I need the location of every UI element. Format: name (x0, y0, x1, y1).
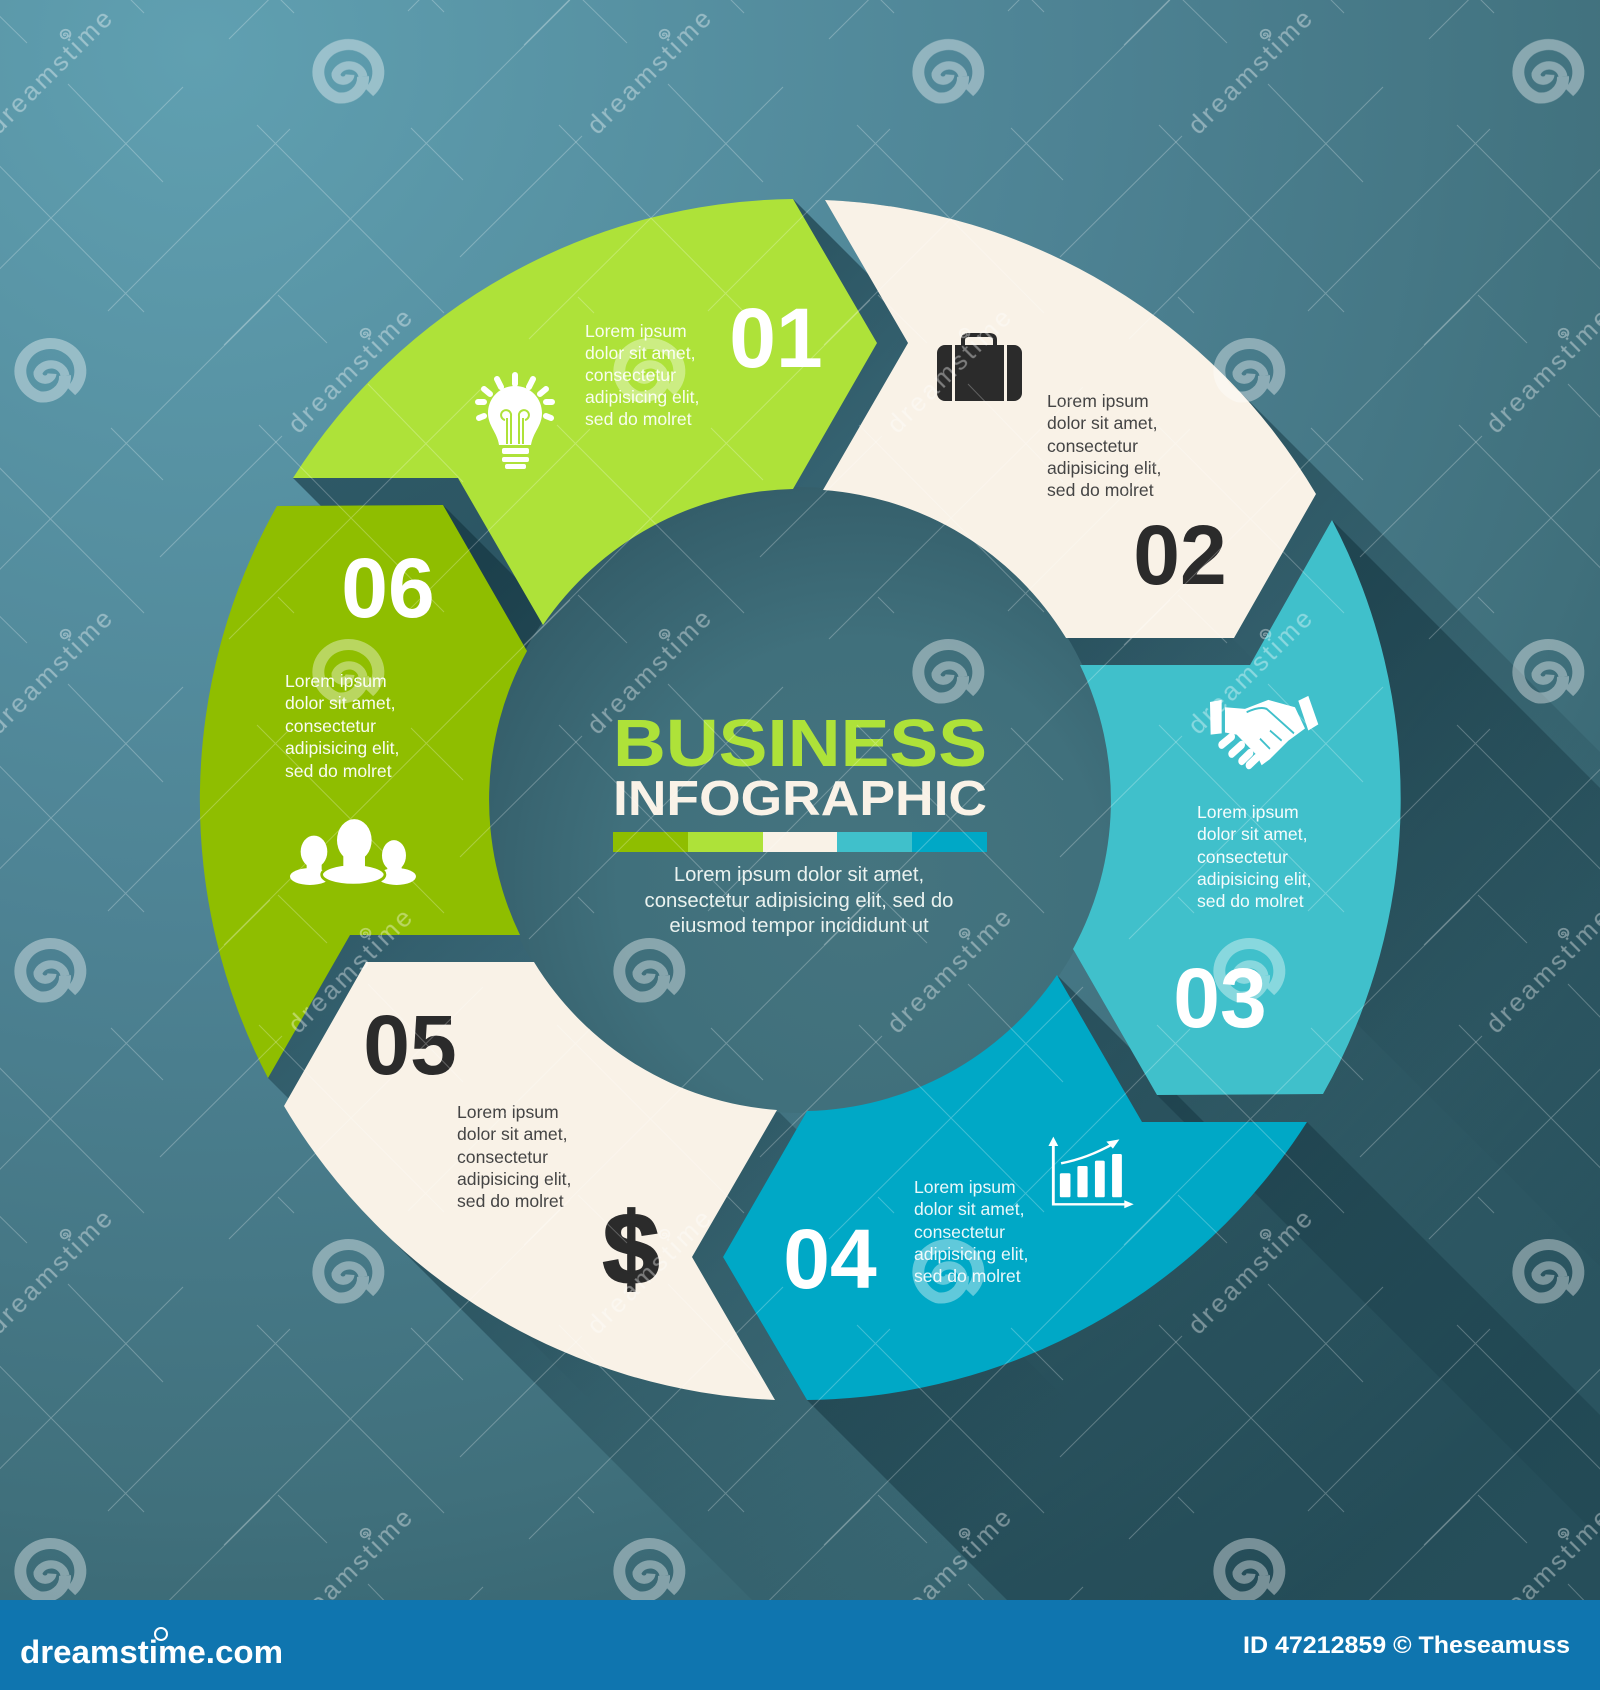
text: 05 description: dolor sit amet, (457, 1124, 568, 1144)
text: 01 description: dolor sit amet, (585, 343, 696, 363)
panel: segment 03 (1073, 520, 1401, 1095)
text: 02 description: consectetur (1047, 436, 1138, 456)
icon: briefcase (937, 335, 1022, 401)
long shadows (268, 199, 1600, 1600)
text: 05 description: adipisicing elit, (457, 1169, 571, 1189)
watermark text: dreamstime (880, 302, 1017, 439)
color bar (613, 832, 987, 852)
text: 01 description: consectetur (585, 365, 676, 385)
icon: handshake (1210, 696, 1318, 765)
number 01: 01 (729, 291, 823, 385)
watermark text: dreamstime (1181, 3, 1318, 140)
text: 04 description: adipisicing elit, (914, 1244, 1028, 1264)
text: 01 description: adipisicing elit, (585, 387, 699, 407)
center paragraph: Lorem ipsum dolor sit amet, (674, 864, 924, 886)
watermark text: dreamstime (1181, 1203, 1318, 1340)
text: 04 description: Lorem ipsum (914, 1177, 1016, 1197)
text: 06 description: consectetur (285, 716, 376, 736)
text: 03 description: Lorem ipsum (1197, 802, 1299, 822)
text: 05 description: sed do molret (457, 1191, 564, 1211)
watermark text: dreamstime (580, 603, 717, 740)
footer logo: dreamstime.com (20, 1634, 283, 1670)
number 02: 02 (1133, 508, 1227, 602)
text: 03 description: adipisicing elit, (1197, 869, 1311, 889)
text: 02 description: Lorem ipsum (1047, 391, 1149, 411)
watermark text: dreamstime (281, 1502, 418, 1639)
footer bar (0, 1600, 1600, 1690)
panel: segment 04 (723, 975, 1307, 1400)
text: 04 description: consectetur (914, 1222, 1005, 1242)
text: 02 description: sed do molret (1047, 480, 1154, 500)
center paragraph: consectetur adipisicing elit, sed do (645, 890, 953, 912)
text: 04 description: sed do molret (914, 1266, 1021, 1286)
number 05: 05 (363, 998, 457, 1092)
panel: segment 02 (823, 200, 1316, 638)
text: 02 description: adipisicing elit, (1047, 458, 1161, 478)
text: 05 description: consectetur (457, 1147, 548, 1167)
panel: segment 06 (200, 505, 527, 1078)
text: 06 description: dolor sit amet, (285, 693, 396, 713)
icon: light bulb (478, 375, 552, 469)
watermark text: dreamstime (580, 3, 717, 140)
text: 06 description: Lorem ipsum (285, 671, 387, 691)
watermark text: dreamstime (1181, 603, 1318, 740)
watermark text: dreamstime (880, 1502, 1017, 1639)
watermark text: dreamstime (281, 902, 418, 1039)
text: 04 description: dolor sit amet, (914, 1199, 1024, 1219)
panel: segment 01 (293, 199, 877, 625)
text: 01 description: Lorem ipsum (585, 321, 687, 341)
watermark text: dreamstime (281, 302, 418, 439)
inner disc (487, 487, 1113, 1113)
icon: people (290, 819, 416, 885)
number 03: 03 (1173, 951, 1267, 1045)
text: 06 description: adipisicing elit, (285, 738, 399, 758)
text: 01 description: sed do molret (585, 409, 692, 429)
text: 06 description: sed do molret (285, 761, 392, 781)
watermark text: dreamstime (580, 1203, 717, 1340)
text: 02 description: dolor sit amet, (1047, 413, 1158, 433)
number 06: 06 (341, 541, 435, 635)
text: 03 description: consectetur (1197, 847, 1288, 867)
panel: segment 05 (284, 962, 777, 1400)
number 04: 04 (783, 1212, 877, 1306)
text: 03 description: sed do molret (1197, 891, 1304, 911)
icon: dollar sign: $ (603, 1193, 659, 1305)
center paragraph: eiusmod tempor incididunt ut (669, 915, 929, 937)
footer image id: ID 47212859 © Theseamuss (1243, 1632, 1570, 1659)
watermark text: dreamstime (880, 902, 1017, 1039)
center title block (613, 706, 987, 937)
text: 05 description: Lorem ipsum (457, 1102, 559, 1122)
text: 03 description: dolor sit amet, (1197, 824, 1308, 844)
heading: infographic: INFOGRAPHIC (613, 772, 987, 826)
heading: business: BUSINESS (613, 706, 987, 781)
icon: growth chart (1048, 1137, 1134, 1208)
